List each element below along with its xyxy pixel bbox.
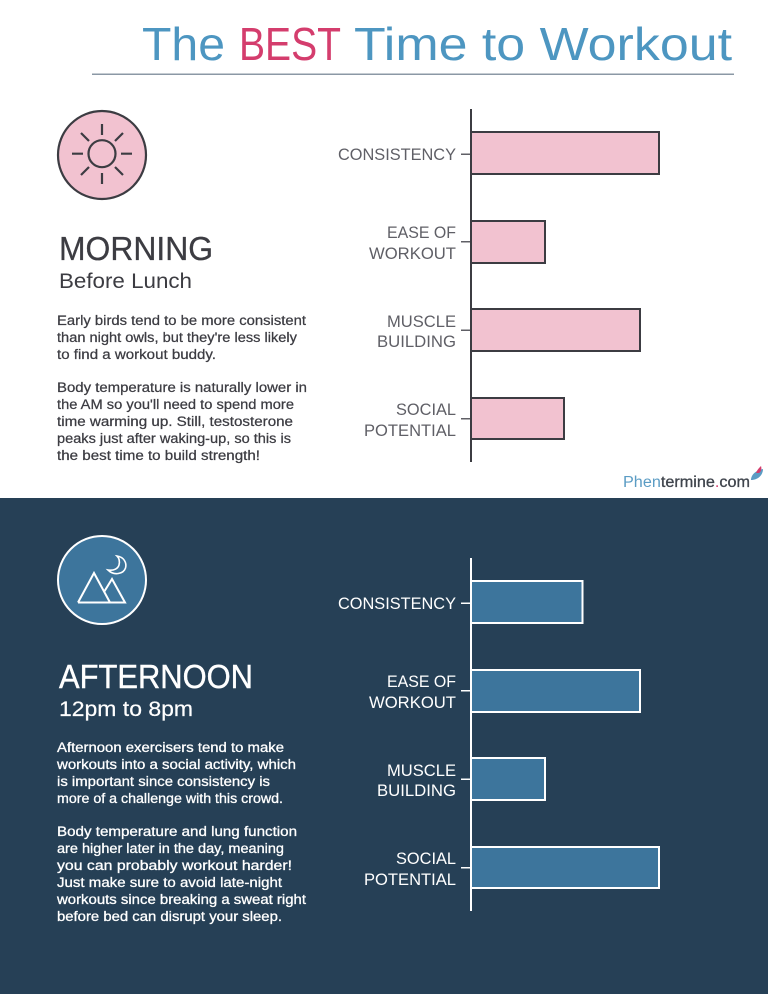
bar: ease of workout: EASE OF (387, 223, 456, 242)
axis (470, 109, 472, 462)
morning text: paragraph two: Body temperature is naturally lower in (57, 380, 307, 395)
bar: consistency: CONSISTENCY (338, 145, 456, 164)
bar: social potential: POTENTIAL (364, 870, 456, 889)
bar: social potential (364, 398, 564, 440)
afternoon text: paragraph two (56, 824, 306, 924)
bar: consistency: CONSISTENCY (338, 594, 456, 613)
afternoon text: paragraph one: Afternoon exercisers tend to make (57, 740, 284, 755)
logo: Phentermine.com: Phentermine.com (623, 474, 750, 491)
afternoon text: paragraph two: you can probably workout harder! (57, 858, 292, 873)
afternoon text: paragraph two: Body temperature and lung function (57, 824, 297, 839)
morning text: paragraph one: Early birds tend to be more consistent (57, 313, 306, 328)
title: BEST (239, 18, 341, 70)
bar: ease of workout: WORKOUT (369, 244, 456, 263)
bar: ease of workout (369, 221, 545, 263)
icon: moon and mountains (58, 536, 146, 624)
bar: muscle building (377, 309, 640, 351)
bar: muscle building: BUILDING (377, 332, 456, 351)
title: Time to Workout (354, 18, 732, 70)
morning text: paragraph two: the AM so you'll need to spend more (57, 397, 294, 412)
morning text: paragraph one: to find a workout buddy. (57, 347, 216, 362)
bar: muscle building (377, 758, 545, 800)
bar: social potential: SOCIAL (396, 400, 456, 419)
icon: sun (58, 111, 146, 199)
afternoon text: paragraph one: workouts into a social activity, which (56, 757, 296, 772)
bar: social potential: POTENTIAL (364, 421, 456, 440)
morning text: paragraph one: than night owls, but they're less likely (57, 330, 297, 345)
title: The (142, 18, 225, 70)
morning subheading: Before Lunch (59, 269, 192, 293)
morning text: paragraph two: time warming up. Still, testosterone (57, 414, 293, 429)
bar chart: afternoon (338, 558, 659, 911)
afternoon text: paragraph two: Just make sure to avoid late-night (57, 875, 282, 890)
morning text: paragraph two: the best time to build strength! (57, 448, 260, 463)
morning text: paragraph two: peaks just after waking-up, so this is (57, 431, 291, 446)
axis (470, 558, 472, 911)
afternoon heading: AFTERNOON (59, 658, 253, 695)
bar: social potential (364, 847, 659, 889)
afternoon text: paragraph two: workouts since breaking a sweat right (56, 892, 306, 907)
title (142, 18, 732, 70)
bar: muscle building: MUSCLE (387, 761, 456, 780)
bar: social potential: SOCIAL (396, 849, 456, 868)
logo: Phentermine.com (623, 466, 763, 491)
bar: muscle building: MUSCLE (387, 312, 456, 331)
bar: ease of workout: WORKOUT (369, 693, 456, 712)
bar: ease of workout (369, 670, 640, 712)
panel: morning (57, 109, 659, 463)
bar chart: morning (338, 109, 659, 462)
afternoon text: paragraph two: before bed can disrupt your sleep. (57, 909, 282, 924)
afternoon text: paragraph one (56, 740, 296, 806)
panel: afternoon (0, 498, 768, 994)
bar: ease of workout: EASE OF (387, 672, 456, 691)
afternoon text: paragraph one: more of a challenge with this crowd. (57, 791, 283, 806)
bar: consistency (338, 581, 582, 623)
afternoon text: paragraph one: is important since consistency is (57, 774, 270, 789)
morning heading: MORNING (59, 230, 213, 267)
morning text: paragraph two (57, 380, 307, 463)
afternoon text: paragraph two: are higher later in the day, meaning (57, 841, 284, 856)
bar: consistency (338, 132, 659, 174)
bar: muscle building: BUILDING (377, 781, 456, 800)
afternoon subheading: 12pm to 8pm (59, 697, 193, 721)
morning text: paragraph one (57, 313, 306, 362)
